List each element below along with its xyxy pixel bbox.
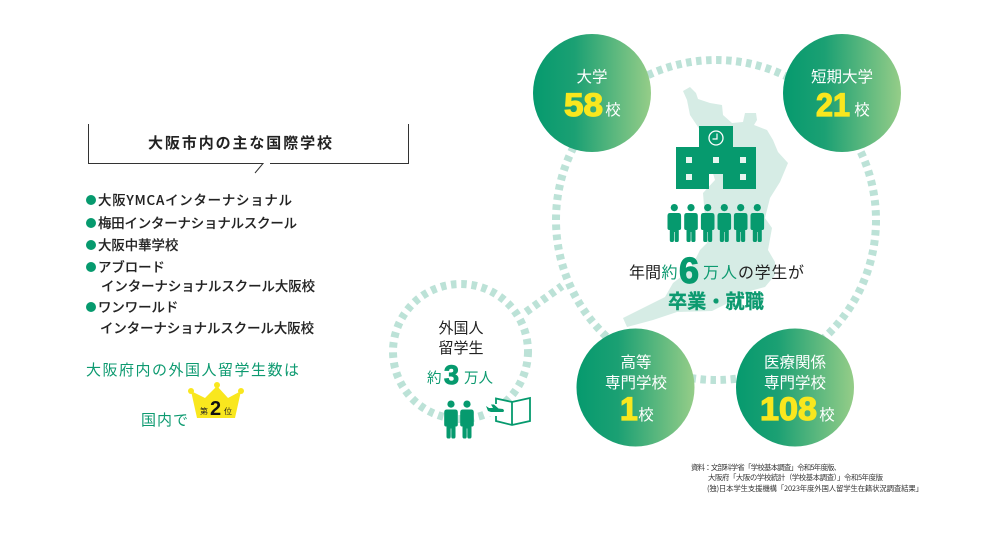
icon: crown rank 2: 2 [210, 398, 221, 420]
list: international schools: 大阪中華学校 [98, 234, 179, 254]
central text: 60,000 students graduate: 万人 [703, 259, 737, 283]
international students text: 約 [427, 370, 442, 387]
dashed connector between the rings [526, 286, 562, 312]
circle: universities: 大学 [576, 65, 608, 87]
circle: universities [533, 34, 651, 152]
icon: book with plane [484, 398, 530, 425]
circle: technical colleges: 校 [638, 403, 654, 425]
circle: junior colleges: 短期大学 [811, 65, 873, 87]
list: international schools: インターナショナルスクール大阪校 [100, 317, 315, 337]
circle: universities: 校 [605, 98, 621, 120]
circle: medical vocational schools [736, 328, 854, 446]
icon: crown rank 2 [188, 382, 244, 420]
source note [691, 462, 923, 494]
international students text: 3 [444, 360, 459, 390]
dashed ring: international students circle [393, 284, 528, 419]
international students text: 万人 [464, 371, 493, 387]
dashed ring: main circle [556, 60, 876, 380]
circle: medical vocational schools: 医療関係 [764, 350, 826, 372]
central text: 60,000 students graduate: 卒業・就職 [668, 291, 764, 313]
icon: six graduates [668, 204, 764, 242]
source note: (独)日本学生支援機構「2023年度外国人留学生在籍状況調査結果」 [707, 483, 923, 494]
international students text: 留学生 [438, 340, 484, 357]
circle: technical colleges: 専門学校 [605, 371, 667, 393]
icon: crown rank 2: 位 [224, 406, 232, 416]
map: Osaka prefecture silhouette [623, 87, 788, 327]
central text: 60,000 students graduate [629, 250, 804, 313]
circle: technical colleges [576, 328, 694, 446]
circle: medical vocational schools: 専門学校 [764, 371, 826, 393]
list: international schools: アブロード [98, 256, 165, 276]
circle: medical vocational schools: 108 [760, 391, 817, 427]
list: international schools: 梅田インターナショナルスクール [98, 212, 297, 232]
central text: 60,000 students graduate: の学生が [738, 259, 804, 283]
international students text [427, 320, 493, 390]
icon: two students [444, 400, 474, 438]
central text: 60,000 students graduate: 6 [679, 250, 699, 291]
source note: 大阪府「大阪の学校統計（学校基本調査）」令和5年度版 [708, 472, 884, 483]
circle: junior colleges: 校 [854, 98, 870, 120]
central text: 60,000 students graduate: 年間 [629, 259, 661, 283]
circle: junior colleges: 21 [816, 87, 850, 123]
list: international schools: インターナショナルスクール大阪校 [101, 275, 316, 295]
circle: medical vocational schools: 校 [819, 403, 835, 425]
heading bracket: international schools: 大阪市内の主な国際学校 [148, 134, 332, 152]
circle: technical colleges: 高等 [620, 350, 652, 372]
icon: school building [676, 126, 756, 189]
callout text: in the country: 国内で [141, 412, 188, 429]
circle: technical colleges: 1 [620, 391, 638, 427]
list: international schools: 大阪YMCAインターナショナル [98, 189, 292, 209]
source note: 資料：文部科学省「学校基本調査」令和5年度版、 [691, 462, 841, 473]
list: international schools: ワンワールド [98, 296, 178, 316]
circle: universities: 58 [564, 87, 603, 123]
circle: junior colleges [783, 34, 901, 152]
international students text: 外国人 [438, 320, 484, 337]
icon: crown rank 2: 第 [200, 406, 208, 416]
central text: 60,000 students graduate: 約 [662, 259, 678, 283]
list: international schools [86, 189, 316, 337]
callout text: foreign students count: 大阪府内の外国人留学生数は [86, 362, 299, 379]
heading bracket: international schools [88, 124, 408, 173]
